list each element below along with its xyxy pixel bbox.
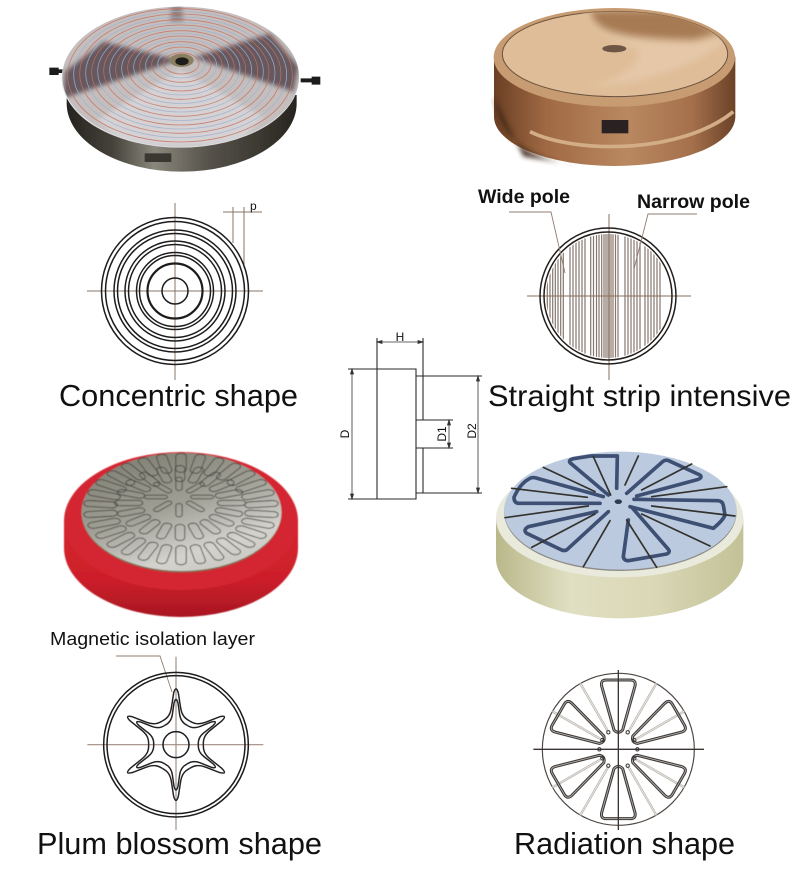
label: D2: D2 [465, 423, 479, 439]
label: H: H [396, 330, 404, 344]
red body [64, 521, 298, 617]
isolation layer paths [514, 456, 725, 561]
center hub [170, 54, 194, 67]
label: magnetic isolation layer: Magnetic isolation layer [50, 629, 255, 649]
name plate [602, 120, 628, 133]
chuck top rim [494, 8, 735, 107]
photo: concentric chuck [49, 5, 320, 172]
plate edge [504, 453, 737, 571]
chuck top face [60, 5, 303, 148]
label: straight strip intensive: Straight strip intensive [488, 380, 791, 413]
center hole [602, 45, 626, 52]
label: wide pole: Wide pole [478, 187, 570, 208]
outer slots [83, 453, 279, 565]
callout line: isolation layer [116, 656, 172, 692]
panel: straight strip intensive [478, 8, 791, 413]
photo: red chuck [64, 452, 298, 617]
middle slots [114, 466, 246, 540]
red top [64, 452, 298, 590]
label: radiation shape: Radiation shape [514, 827, 735, 861]
chuck body [67, 95, 297, 172]
silver plate [82, 454, 282, 572]
panel: plum blossom shape [37, 452, 322, 861]
callout line: wide pole [509, 212, 565, 273]
diagram: plum blossom star [87, 657, 263, 830]
chuck rim [62, 8, 299, 148]
name plate [145, 153, 171, 162]
plate face [504, 452, 737, 570]
diagram: radial wedges [533, 670, 704, 830]
panel: dimension drawing [338, 330, 482, 499]
lower band [530, 112, 733, 147]
center hole [615, 499, 622, 504]
inner slots [144, 477, 214, 517]
pale rim [496, 459, 743, 577]
chuck body [494, 57, 735, 166]
drawing outline [348, 338, 482, 499]
label: p dimension: p [250, 199, 257, 213]
slots [505, 456, 735, 567]
top face shading [580, 10, 727, 87]
photo: copper chuck [494, 8, 735, 166]
label: D1: D1 [435, 426, 449, 442]
khaki body [496, 518, 743, 618]
label: concentric shape: Concentric shape [59, 379, 298, 413]
chuck top face [502, 11, 728, 97]
dimension arrows [350, 340, 480, 499]
panel: radiation shape [496, 452, 743, 861]
silver face [82, 453, 282, 571]
label: D: D [338, 429, 352, 438]
diagram: concentric rings [87, 203, 263, 380]
icon: left bolt [49, 68, 64, 75]
label: plum blossom shape: Plum blossom shape [37, 827, 322, 861]
callout line: narrow pole [634, 214, 697, 269]
diagram: strip circle [527, 214, 691, 380]
panel: concentric shape [49, 5, 320, 413]
label: narrow pole: Narrow pole [637, 192, 750, 213]
icon: right bolt [301, 77, 320, 85]
lower shadow [494, 97, 580, 166]
photo: slotted chuck [496, 452, 743, 618]
